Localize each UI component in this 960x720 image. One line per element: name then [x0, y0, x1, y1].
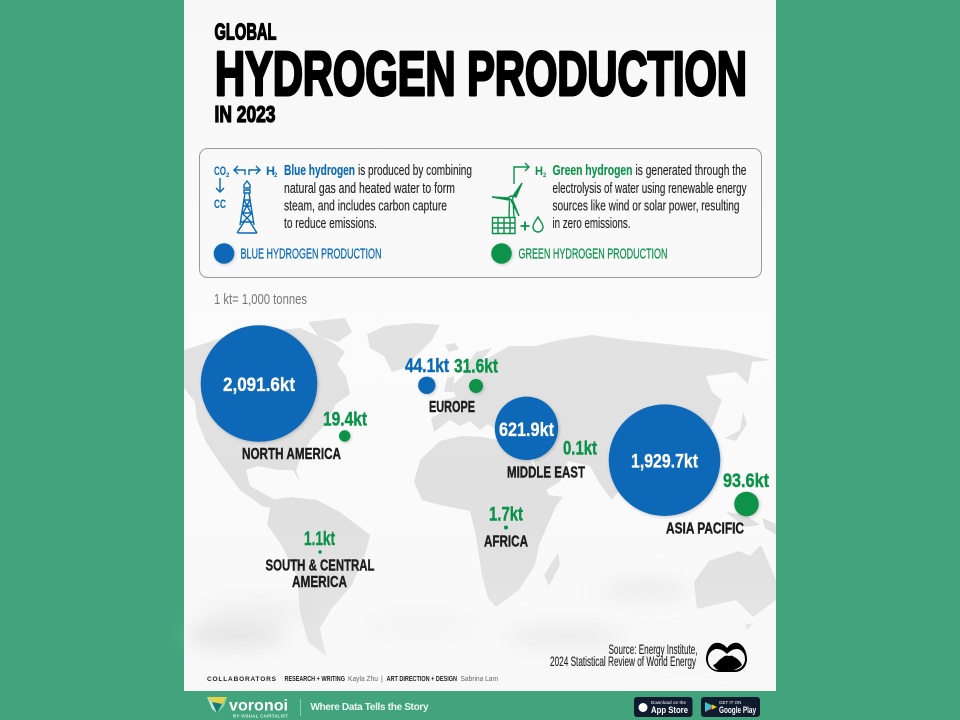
green hydrogen description: is generated through the — [636, 162, 746, 179]
tagline: Where Data Tells the Story — [310, 702, 429, 713]
value: 44.1kt: 44.1kt — [405, 355, 449, 377]
title: kicker: GLOBAL — [214, 18, 276, 44]
title: year: IN 2023 — [214, 101, 276, 127]
google play button — [701, 697, 760, 717]
legend panel — [200, 148, 762, 278]
bubble: blue Middle East — [495, 397, 558, 460]
bubble: green North America — [339, 430, 350, 442]
green hydrogen description: electrolysis of water using renewable energy — [552, 180, 747, 197]
bubble: green Africa — [504, 526, 508, 530]
value: 621.9kt: 621.9kt — [499, 419, 554, 441]
google play button: Google Play — [719, 705, 756, 716]
region: Asia Pacific — [609, 404, 769, 538]
legend: green marker — [491, 243, 512, 264]
icon: green hydrogen wind and solar: H — [535, 164, 543, 178]
title — [214, 18, 747, 127]
legend: blue label: BLUE HYDROGEN PRODUCTION — [240, 246, 382, 262]
bubble: blue Asia Pacific — [609, 404, 720, 516]
bubble: blue North America — [201, 325, 317, 442]
value: 31.6kt: 31.6kt — [454, 356, 498, 378]
icon: blue hydrogen tower — [214, 164, 278, 233]
value: 1.1kt: 1.1kt — [304, 528, 335, 550]
source: Source: Energy Institute, — [608, 641, 698, 657]
green hydrogen description — [552, 162, 747, 232]
credits — [207, 674, 498, 683]
icon: binocular mascot logo — [706, 643, 747, 672]
app store button — [634, 697, 692, 717]
world map — [184, 318, 776, 656]
region: North America — [201, 325, 367, 463]
value: 2,091.6kt: 2,091.6kt — [223, 374, 295, 396]
region: Africa — [484, 504, 528, 551]
bubble: green Asia Pacific — [734, 492, 759, 516]
label: Africa: AFRICA — [484, 534, 528, 551]
bubble: green Europe — [469, 379, 483, 393]
label: North America: NORTH AMERICA — [242, 446, 341, 463]
legend: blue marker — [214, 243, 234, 264]
voronoi wordmark: voronoi — [229, 698, 288, 714]
label: second line: AMERICA — [292, 574, 347, 591]
value: 1.7kt: 1.7kt — [489, 504, 523, 526]
green hydrogen description: sources like wind or solar power, resulting — [552, 198, 740, 214]
value: 0.1kt: 0.1kt — [563, 437, 597, 459]
icon: blue hydrogen tower: 2 — [274, 173, 278, 179]
credits: Sabrina Lam — [460, 676, 498, 683]
legend: green label: GREEN HYDROGEN PRODUCTION — [518, 246, 668, 262]
region: Europe — [405, 355, 498, 416]
icon: blue hydrogen tower: H — [266, 164, 275, 178]
value: 1,929.7kt: 1,929.7kt — [631, 451, 698, 473]
credits: ART DIRECTION + DESIGN — [386, 674, 457, 683]
wordmark subtitle: BY VISUAL CAPITALIST — [233, 714, 288, 718]
cloud texture — [185, 581, 750, 662]
credits: RESEARCH + WRITING — [284, 674, 345, 683]
main panel — [184, 0, 776, 691]
divider — [300, 699, 301, 716]
credits: Kayla Zhu — [348, 676, 378, 683]
credits: COLLABORATORS — [207, 676, 277, 683]
blue hydrogen description: to reduce emissions. — [284, 215, 377, 232]
legend frame — [200, 148, 762, 278]
footer bar — [184, 691, 776, 720]
icon: blue hydrogen tower: CO — [214, 164, 226, 178]
region: South and Central America — [266, 528, 374, 591]
label: South & Central America: SOUTH & CENTRAL — [266, 558, 374, 575]
blue hydrogen description: is produced by combining — [358, 162, 472, 179]
blue hydrogen description — [284, 162, 472, 232]
unit note: 1 kt= 1,000 tonnes — [214, 291, 307, 308]
icon: green hydrogen wind and solar — [492, 163, 547, 234]
value: 19.4kt: 19.4kt — [323, 408, 367, 430]
app store button: Download on the — [651, 700, 686, 705]
credits: | — [381, 676, 383, 683]
app store button: App Store — [651, 705, 688, 716]
source: 2024 Statistical Review of World Energy — [550, 653, 696, 669]
icon: blue hydrogen tower: CC — [214, 197, 226, 211]
footer background — [184, 691, 776, 720]
icon: green hydrogen wind and solar: 2 — [543, 173, 547, 179]
blue hydrogen description: steam, and includes carbon capture — [284, 198, 447, 214]
label: Middle East: MIDDLE EAST — [507, 464, 585, 482]
green hydrogen description: Green hydrogen — [552, 162, 632, 179]
bubble: green South America — [318, 550, 322, 554]
label: Europe: EUROPE — [429, 399, 475, 416]
label: Asia Pacific: ASIA PACIFIC — [666, 521, 744, 538]
source — [550, 641, 698, 669]
icon: voronoi logo mark — [207, 697, 227, 713]
google play button: GET IT ON — [719, 700, 741, 705]
icon: blue hydrogen tower: 2 — [226, 173, 230, 179]
blue hydrogen description: natural gas and heated water to form — [284, 180, 455, 197]
blue hydrogen description: Blue hydrogen — [284, 162, 355, 179]
bubble: blue Europe — [418, 377, 435, 394]
value: 93.6kt: 93.6kt — [723, 470, 769, 492]
green hydrogen description: in zero emissions. — [552, 215, 630, 232]
region: Middle East — [495, 397, 597, 482]
